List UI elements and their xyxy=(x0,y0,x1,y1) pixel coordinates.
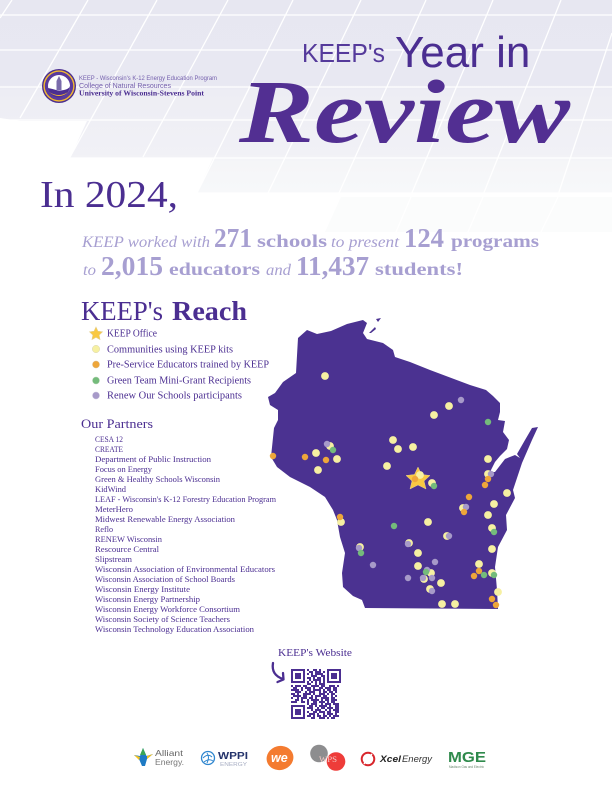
stats summary text: schools xyxy=(257,231,327,251)
heading: KEEP's Reach xyxy=(81,296,247,326)
stats summary text xyxy=(81,223,539,281)
arrow to QR code xyxy=(273,663,284,682)
stats summary text: programs xyxy=(451,231,539,251)
logo: University of Wisconsin-Stevens Point seal and wordmark: KEEP - Wisconsin's K-12 Energy Education Program xyxy=(79,75,217,82)
partners list: Wisconsin Energy Workforce Consortium xyxy=(95,605,240,614)
logo: We Energies xyxy=(264,743,296,773)
logo: Alliant Energy: Alliant xyxy=(155,748,184,758)
map legend: Renew Our Schools participants xyxy=(107,390,242,402)
title: Year in xyxy=(395,28,530,77)
partners list: Wisconsin Association of Environmental Educators xyxy=(95,565,275,574)
icon: yellow dot xyxy=(92,345,100,353)
stats summary text: to present xyxy=(331,234,400,251)
map of Wisconsin xyxy=(268,318,538,609)
stats summary text: to xyxy=(83,262,96,279)
partners list: Midwest Renewable Energy Association xyxy=(95,515,236,524)
stats summary text: 271 xyxy=(214,223,252,253)
dots: communities using KEEP kits xyxy=(312,372,511,608)
logo: We Energies: we xyxy=(271,751,288,765)
logo: University of Wisconsin-Stevens Point seal and wordmark xyxy=(42,69,217,103)
map legend: Green Team Mini-Grant Recipients xyxy=(107,376,251,386)
partners list: KidWind xyxy=(95,485,127,494)
QR code xyxy=(291,669,341,719)
partners list: MeterHero xyxy=(95,505,133,514)
logo: WPPI Energy: ENERGY xyxy=(220,762,248,768)
heading: In 2024: In 2024, xyxy=(40,174,178,216)
stats summary text: 124 xyxy=(404,223,444,253)
stats summary text: educators xyxy=(169,259,260,279)
stats summary text: 2,015 xyxy=(101,251,163,281)
logo: Xcel Energy: Energy xyxy=(402,754,433,764)
partners list: Wisconsin Technology Education Association xyxy=(95,625,255,634)
logo: Alliant Energy: Energy. xyxy=(155,757,184,767)
partners list: CESA 12 xyxy=(95,435,123,444)
logo: MGE: Madison Gas and Electric xyxy=(449,765,484,769)
partners list xyxy=(81,417,276,634)
heading: KEEP's Reach: KEEP's xyxy=(81,296,163,326)
icon: star, KEEP Office xyxy=(90,327,102,340)
partners list: CREATE xyxy=(95,445,123,454)
logo: WPS xyxy=(310,745,345,771)
label: KEEP's Website: KEEP's Website xyxy=(278,648,352,659)
background: solar panel grid xyxy=(0,0,612,232)
partners list: Wisconsin Energy Partnership xyxy=(95,595,200,604)
icon: orange dot xyxy=(92,361,100,368)
logo: WPPI Energy xyxy=(202,750,248,768)
stats summary text: students! xyxy=(375,259,463,279)
islands xyxy=(369,318,381,333)
map legend: Communities using KEEP kits xyxy=(107,344,233,356)
icon: green dot xyxy=(92,377,100,384)
partners list: Slipstream xyxy=(95,555,132,564)
logo: University of Wisconsin-Stevens Point seal and wordmark: University of Wisconsin-Stevens Point xyxy=(79,90,205,98)
logo: Xcel Energy xyxy=(362,753,433,765)
map legend: Pre-Service Educators trained by KEEP xyxy=(107,360,269,370)
logo: WPPI Energy: WPPI xyxy=(218,750,248,762)
logo: MGE: MGE xyxy=(448,749,486,766)
heading: KEEP's Reach: Reach xyxy=(172,296,247,326)
partners list: Wisconsin Association of School Boards xyxy=(95,575,235,584)
logo: Xcel Energy: Xcel xyxy=(379,754,402,764)
partners list: Rescource Central xyxy=(95,545,160,554)
partners list: LEAF - Wisconsin's K-12 Forestry Education Program xyxy=(95,495,276,504)
title: KEEP's xyxy=(302,39,385,68)
stats summary text: and xyxy=(266,262,292,279)
map legend xyxy=(90,327,269,402)
map legend: KEEP Office xyxy=(107,328,158,340)
title: Review xyxy=(238,62,571,162)
logo: University of Wisconsin-Stevens Point seal and wordmark: College of Natural Resources xyxy=(79,81,171,90)
partners list: Wisconsin Society of Science Teachers xyxy=(95,615,230,624)
partners list: Focus on Energy xyxy=(95,465,153,474)
partners list: Green & Healthy Schools Wisconsin xyxy=(95,475,221,484)
partners list: Reflo xyxy=(95,525,113,534)
star: KEEP Office xyxy=(406,467,430,489)
logo: Alliant Energy xyxy=(134,748,184,767)
heading: Our Partners: Our Partners xyxy=(81,417,153,431)
partners list: RENEW Wisconsin xyxy=(95,535,163,544)
logo: WPS: WPS xyxy=(319,755,337,764)
icon: purple dot xyxy=(92,392,100,399)
stats summary text: 11,437 xyxy=(296,251,369,281)
partners list: Department of Public Instruction xyxy=(95,455,212,464)
dots: Renew Our Schools participants xyxy=(324,397,494,594)
partners list: Wisconsin Energy Institute xyxy=(95,585,190,594)
dots: Green Team Mini-Grant recipients xyxy=(330,419,497,578)
dots: Pre-Service Educators xyxy=(270,453,499,608)
stats summary text: KEEP worked with xyxy=(81,234,210,251)
